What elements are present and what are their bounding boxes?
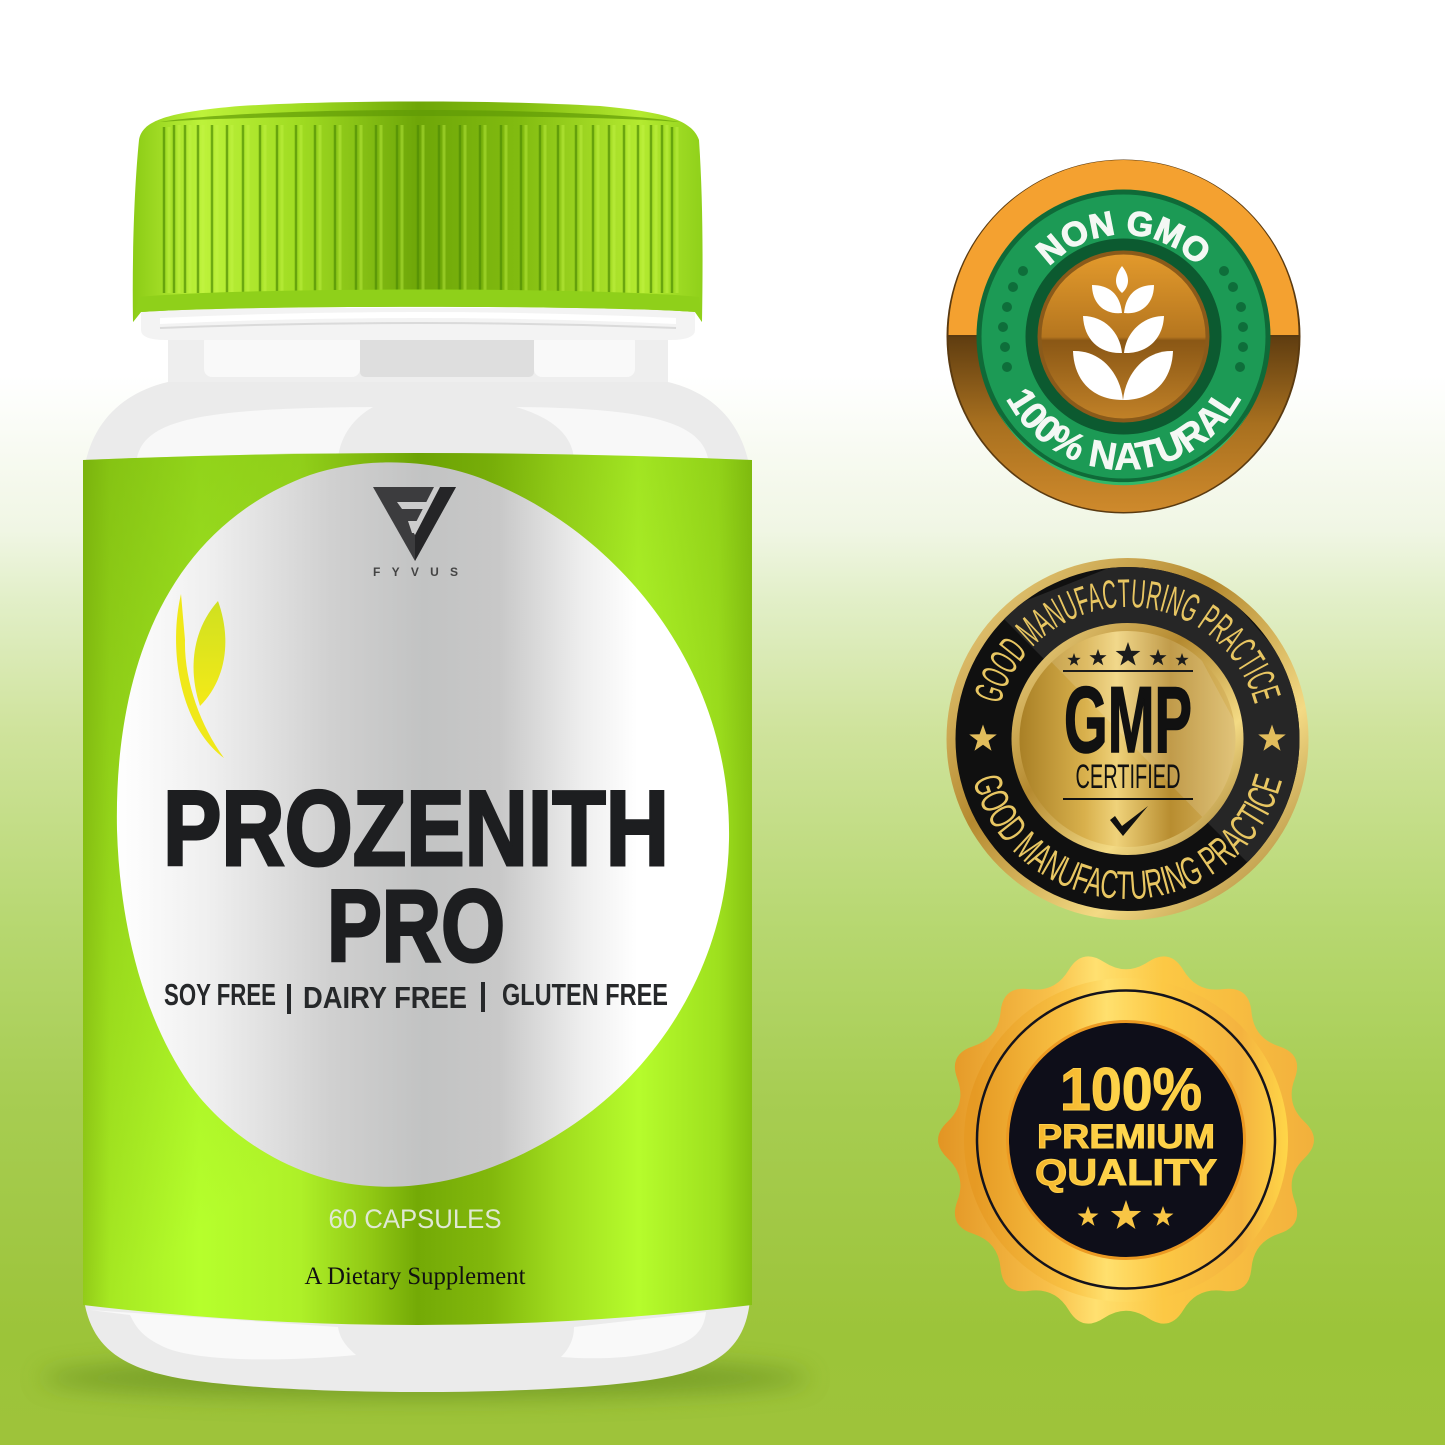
green cap (133, 102, 703, 322)
free-from claims (164, 977, 668, 1015)
side stars (969, 724, 1286, 751)
badge text bottom: 100% NATURAL (1006, 388, 1242, 470)
badge text top: NON GMO (1034, 210, 1208, 266)
badge: premium quality (938, 956, 1314, 1324)
badge: GMP certified (946, 558, 1308, 920)
GMP label: GMP (1064, 667, 1192, 772)
ring text top: GOOD MANUFACTURING PRACTICE (976, 579, 1281, 704)
wheat icon (1073, 266, 1173, 400)
FYVUS logo (373, 487, 458, 579)
check mark (1110, 806, 1148, 836)
free-from claims: SOY FREE (164, 977, 276, 1012)
bottle body (84, 382, 750, 1392)
free-from claims: GLUTEN FREE (502, 977, 668, 1012)
quality word: QUALITY (1035, 1152, 1217, 1193)
product name line two: PRO (327, 869, 505, 983)
quality text: 100% (1060, 1056, 1202, 1123)
badge: non GMO (946, 160, 1300, 514)
decorative dots (998, 266, 1248, 372)
supplement line: A Dietary Supplement (304, 1263, 526, 1290)
ring text bottom: GOOD MANUFACTURING PRACTICE (974, 773, 1282, 899)
centre stars (1067, 642, 1189, 666)
capsule count: 60 CAPSULES (328, 1204, 502, 1234)
green label (83, 453, 752, 1325)
supplement bottle (83, 102, 752, 1392)
bottle shadow (40, 1358, 810, 1398)
FYVUS logo: FYVUS (373, 565, 458, 579)
bottle neck (141, 308, 695, 395)
premium word: PREMIUM (1037, 1118, 1215, 1156)
certified label: CERTIFIED (1076, 758, 1180, 796)
three stars (1078, 1200, 1173, 1229)
free-from claims: DAIRY FREE (303, 980, 467, 1015)
product name: PROZENITH (163, 768, 669, 888)
white label circle (117, 462, 729, 1187)
leaf icon (176, 594, 225, 758)
